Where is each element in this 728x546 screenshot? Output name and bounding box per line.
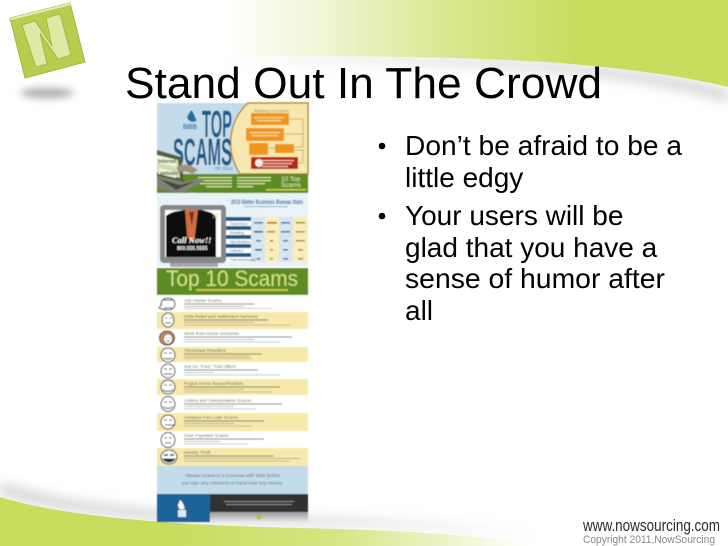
green stats band: Scams [281, 182, 302, 189]
anatomy of a scam panel [231, 103, 308, 174]
scam headings: Identity Theft [184, 450, 211, 455]
stats table: Offerful [230, 248, 243, 253]
tv illustration [160, 205, 226, 267]
embedded infographic: top scams [157, 103, 308, 522]
closing message panel: you sign any contracts or hand over any money. [182, 480, 283, 486]
infographic header panel: Anatomy of a Scam [254, 108, 290, 113]
scam headings: Timeshare Resellers [184, 348, 227, 353]
bottom green swoosh [0, 488, 545, 546]
scam faces [159, 298, 177, 464]
scam headings: Debt Relief and Settlement Services [184, 314, 258, 319]
scam headings: Lottery and Sweepstakes Scams [184, 398, 252, 403]
stats section panel: 2010 Better Business Bureau Stats [231, 199, 303, 206]
bullet 2: glad that you have a [405, 232, 658, 263]
stats table: Roofing [230, 230, 244, 235]
stats table: Thermostream [230, 257, 257, 262]
infographic header panel [157, 103, 308, 174]
scam descriptions [184, 304, 300, 461]
logo letter [22, 14, 71, 67]
bullet 1 [379, 130, 682, 193]
bullet 2: sense of humor after [405, 263, 665, 294]
infographic header panel: OF 2010 [215, 166, 233, 171]
infographic header panel: SCAMS [173, 132, 232, 174]
closing message panel: Always review in a business with BBB before [185, 473, 281, 479]
scam list [157, 298, 308, 466]
laptop illustration [157, 150, 204, 198]
stats table [226, 217, 308, 262]
bullet list [379, 130, 682, 326]
scam headings: Not So "Free" Trial Offers [184, 364, 236, 369]
scam headings [184, 298, 258, 455]
laptop illustration: website [159, 171, 179, 177]
bullet 1: little edgy [405, 162, 523, 193]
closing message panel [157, 466, 308, 494]
logo shadow [20, 88, 74, 98]
scam headings: Work from Home Schemes [184, 331, 240, 336]
green stats band: 10 Top [281, 176, 301, 183]
scam headings: Rogue Home Repair/Roofers [184, 381, 244, 386]
bbb footer [157, 494, 308, 522]
scam headings: Advance Fee Loan Scams [184, 415, 239, 420]
top green swoosh [0, 0, 728, 97]
top 10 scams banner: Top 10 Scams [166, 266, 298, 291]
stats table: Television [230, 221, 248, 226]
logo: N block [10, 3, 85, 98]
infographic header panel: TOP [202, 104, 232, 146]
scam headings: Job Hunter Scams [184, 298, 222, 303]
bullet 2: Your users will be [405, 200, 623, 231]
stats table: Sportsation [230, 239, 250, 244]
copyright: Copyright 2011,NowSourcing [583, 534, 715, 546]
tv illustration: Call Now!! [172, 235, 211, 245]
tv illustration: 10 [212, 214, 218, 220]
bullet 1: Don’t be afraid to be a [405, 130, 682, 161]
scam headings: Over Payment Scams [184, 433, 229, 438]
BBB torch mark [187, 110, 197, 122]
green stats band [157, 174, 308, 193]
tv illustration: 800.555.5555 [177, 246, 208, 252]
infographic header panel: BBB [183, 124, 197, 131]
logo block [10, 3, 85, 78]
bullet 2: all [405, 295, 433, 326]
title: Stand Out In The Crowd [125, 59, 602, 108]
laptop illustration: Internet [158, 159, 177, 165]
bullet 2 [379, 200, 665, 326]
stats section panel [157, 193, 308, 267]
